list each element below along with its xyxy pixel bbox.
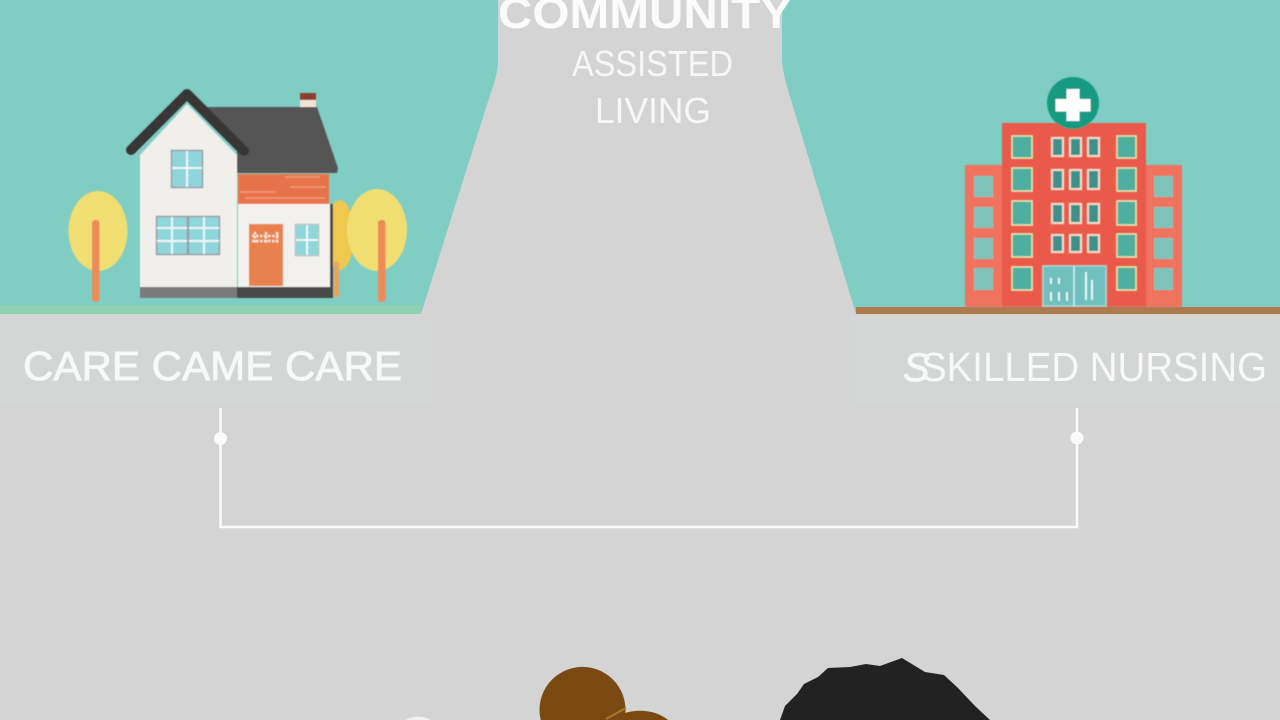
heading: assisted: ASSISTED xyxy=(572,43,733,84)
house chimney xyxy=(300,93,316,107)
house door xyxy=(249,224,283,286)
house side window xyxy=(296,224,318,256)
ground: soil xyxy=(856,307,1280,314)
icon: right tree xyxy=(347,189,407,302)
house front wall xyxy=(140,104,237,287)
hospital wings xyxy=(965,165,1182,307)
hospital inner windows xyxy=(1052,138,1099,252)
house lower window right xyxy=(188,216,220,254)
connector bracket xyxy=(214,408,1084,527)
hospital wing windows xyxy=(974,176,1173,290)
house side roof xyxy=(206,107,338,173)
hospital outer windows xyxy=(1012,136,1136,290)
label: skilled nursing: SKILLED NURSING xyxy=(921,344,1267,390)
figure: brown hair xyxy=(540,667,668,720)
house gable roof xyxy=(131,94,244,151)
icon: house with trees xyxy=(68,93,407,302)
ground: grass xyxy=(0,305,421,314)
house right wall xyxy=(238,204,330,287)
hospital entrance xyxy=(1043,266,1106,306)
icon: left tree xyxy=(68,191,128,302)
heading: living: LIVING xyxy=(595,90,711,131)
icon: hospital xyxy=(965,77,1182,307)
figure: partial head xyxy=(405,716,431,720)
icon: middle tree xyxy=(326,200,354,297)
label: home care: CARE CAME CARE xyxy=(23,343,402,389)
background sky xyxy=(0,0,1280,315)
house upper window xyxy=(172,150,202,188)
hospital cross badge xyxy=(1047,77,1099,129)
figure: black hair xyxy=(780,658,990,720)
house foundation xyxy=(140,287,333,298)
house brick band xyxy=(238,174,329,204)
label bands xyxy=(0,314,1280,406)
hospital main block xyxy=(1002,123,1146,307)
house lower window left xyxy=(156,216,188,254)
label: skilled nursing: S xyxy=(903,346,930,390)
